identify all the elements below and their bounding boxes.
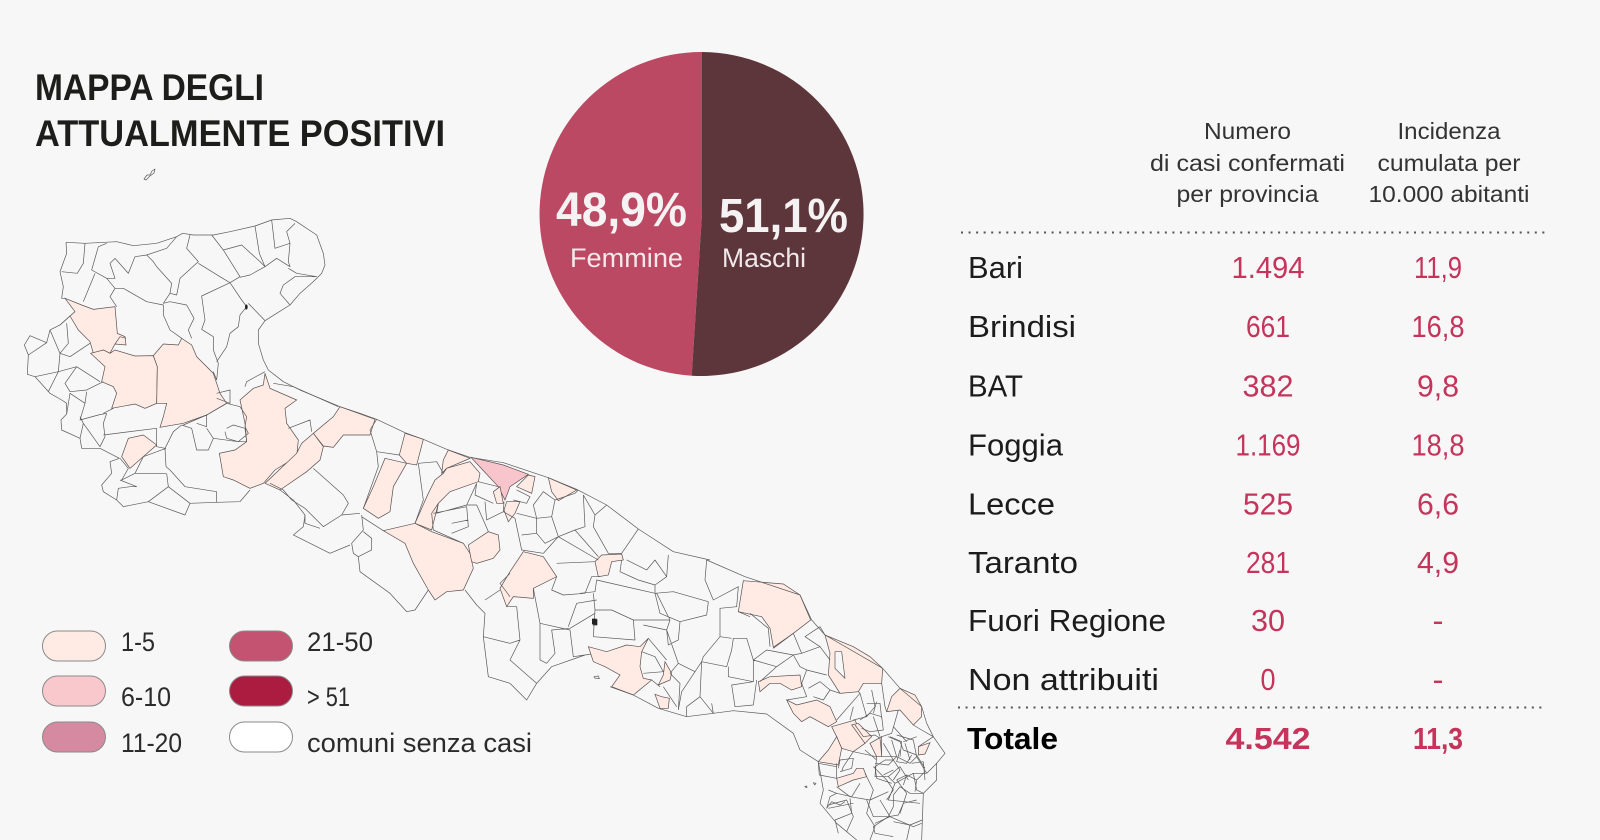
pie slice: maschi [692, 52, 864, 376]
legend item: >51 [230, 676, 350, 712]
row: Non attribuiti: - [1432, 662, 1444, 697]
table header: numero di casi: per provincia [1176, 181, 1319, 207]
row: Foggia: 18,8 [1412, 428, 1464, 462]
legend item: 21-50 [230, 627, 373, 661]
row: Bari: 1.494 [1232, 250, 1304, 285]
row: Fuori Regione: - [1432, 603, 1444, 638]
legend item: 21-50: 21-50 [307, 627, 373, 657]
legend [42, 627, 532, 758]
row: Fuori Regione [968, 603, 1444, 638]
legend item: 6-10: 6-10 [121, 682, 171, 712]
row: BAT: 382 [1242, 368, 1294, 404]
row: Totale [967, 721, 1463, 756]
row: Lecce [968, 486, 1459, 522]
row: Totale: 11,3 [1413, 721, 1463, 756]
table header: incidenza [1368, 118, 1530, 207]
row: BAT: 9,8 [1417, 368, 1459, 404]
row: Brindisi: 16,8 [1412, 309, 1464, 344]
legend item: 11-20: 11-20 [121, 728, 182, 758]
row: Lecce: Lecce [968, 486, 1055, 522]
row: Bari [968, 250, 1462, 285]
pie label: femmine: 48,9% [556, 184, 687, 237]
map: small dark enclave [245, 304, 248, 310]
table header: numero di casi: Numero [1204, 118, 1291, 144]
map: southern section (Taranto, Brindisi, Lecce) [580, 560, 945, 840]
legend item: comuni senza casi: comuni senza casi [307, 728, 532, 758]
legend item: 1-5 [42, 627, 155, 661]
row: Brindisi: Brindisi [968, 309, 1076, 344]
map: small coastal islets [594, 676, 816, 788]
map: central section (BAT and Bari provinces) [270, 407, 710, 700]
map: tiny enclave near Gioia [593, 619, 597, 625]
table header: numero di casi: di casi confermati [1150, 150, 1345, 176]
pie slice: femmine [540, 52, 702, 376]
row: Foggia [968, 428, 1464, 462]
choropleth map of Puglia municipalities [24, 169, 945, 840]
row: Non attribuiti: 0 [1260, 662, 1276, 697]
table header: incidenza: cumulata per [1378, 150, 1521, 176]
row: Brindisi [968, 309, 1464, 344]
row: Fuori Regione: Fuori Regione [968, 603, 1166, 638]
map: Salento dense municipalities [818, 702, 925, 840]
row: Lecce: 525 [1243, 486, 1293, 522]
pie label: maschi [719, 190, 848, 273]
row: Non attribuiti [968, 662, 1444, 697]
pie label: femmine: Femmine [570, 243, 683, 273]
legend item: 1-5: 1-5 [121, 627, 155, 657]
row: Lecce: 6,6 [1417, 486, 1459, 522]
table header: incidenza: 10.000 abitanti [1368, 181, 1530, 207]
pie label: maschi: 51,1% [719, 190, 848, 243]
row: Bari: Bari [968, 250, 1023, 285]
row: Fuori Regione: 30 [1251, 603, 1285, 638]
map: Tremiti islands [144, 169, 155, 180]
row: Bari: 11,9 [1414, 250, 1462, 285]
pie label: maschi: Maschi [722, 243, 806, 273]
row: Taranto: Taranto [968, 545, 1078, 580]
pie chart: gender split [540, 52, 864, 376]
title [35, 67, 445, 154]
title: MAPPA DEGLI [35, 67, 264, 108]
row: Totale: 4.542 [1226, 721, 1310, 756]
row: Taranto [968, 545, 1459, 580]
row: Brindisi: 661 [1246, 309, 1290, 344]
legend item: >51: > 51 [307, 682, 350, 712]
legend item: 6-10 [42, 676, 171, 712]
pie label: femmine [556, 184, 687, 273]
row: Foggia: Foggia [968, 428, 1064, 462]
row: Taranto: 4,9 [1417, 545, 1459, 580]
legend item: comuni senza casi [230, 722, 532, 758]
table header: incidenza: Incidenza [1398, 118, 1501, 144]
row: Totale: Totale [967, 721, 1058, 756]
table of cases by province [958, 118, 1548, 756]
row: Taranto: 281 [1246, 545, 1290, 580]
row: BAT: BAT [968, 368, 1023, 404]
title: ATTUALMENTE POSITIVI [35, 113, 445, 154]
row: Non attribuiti: Non attribuiti [968, 662, 1159, 697]
row: BAT [968, 368, 1459, 404]
row: Foggia: 1.169 [1236, 428, 1300, 462]
map: northern section (Foggia province) [24, 218, 375, 528]
table header: numero di casi [1150, 118, 1345, 207]
legend item: 11-20 [42, 722, 182, 758]
